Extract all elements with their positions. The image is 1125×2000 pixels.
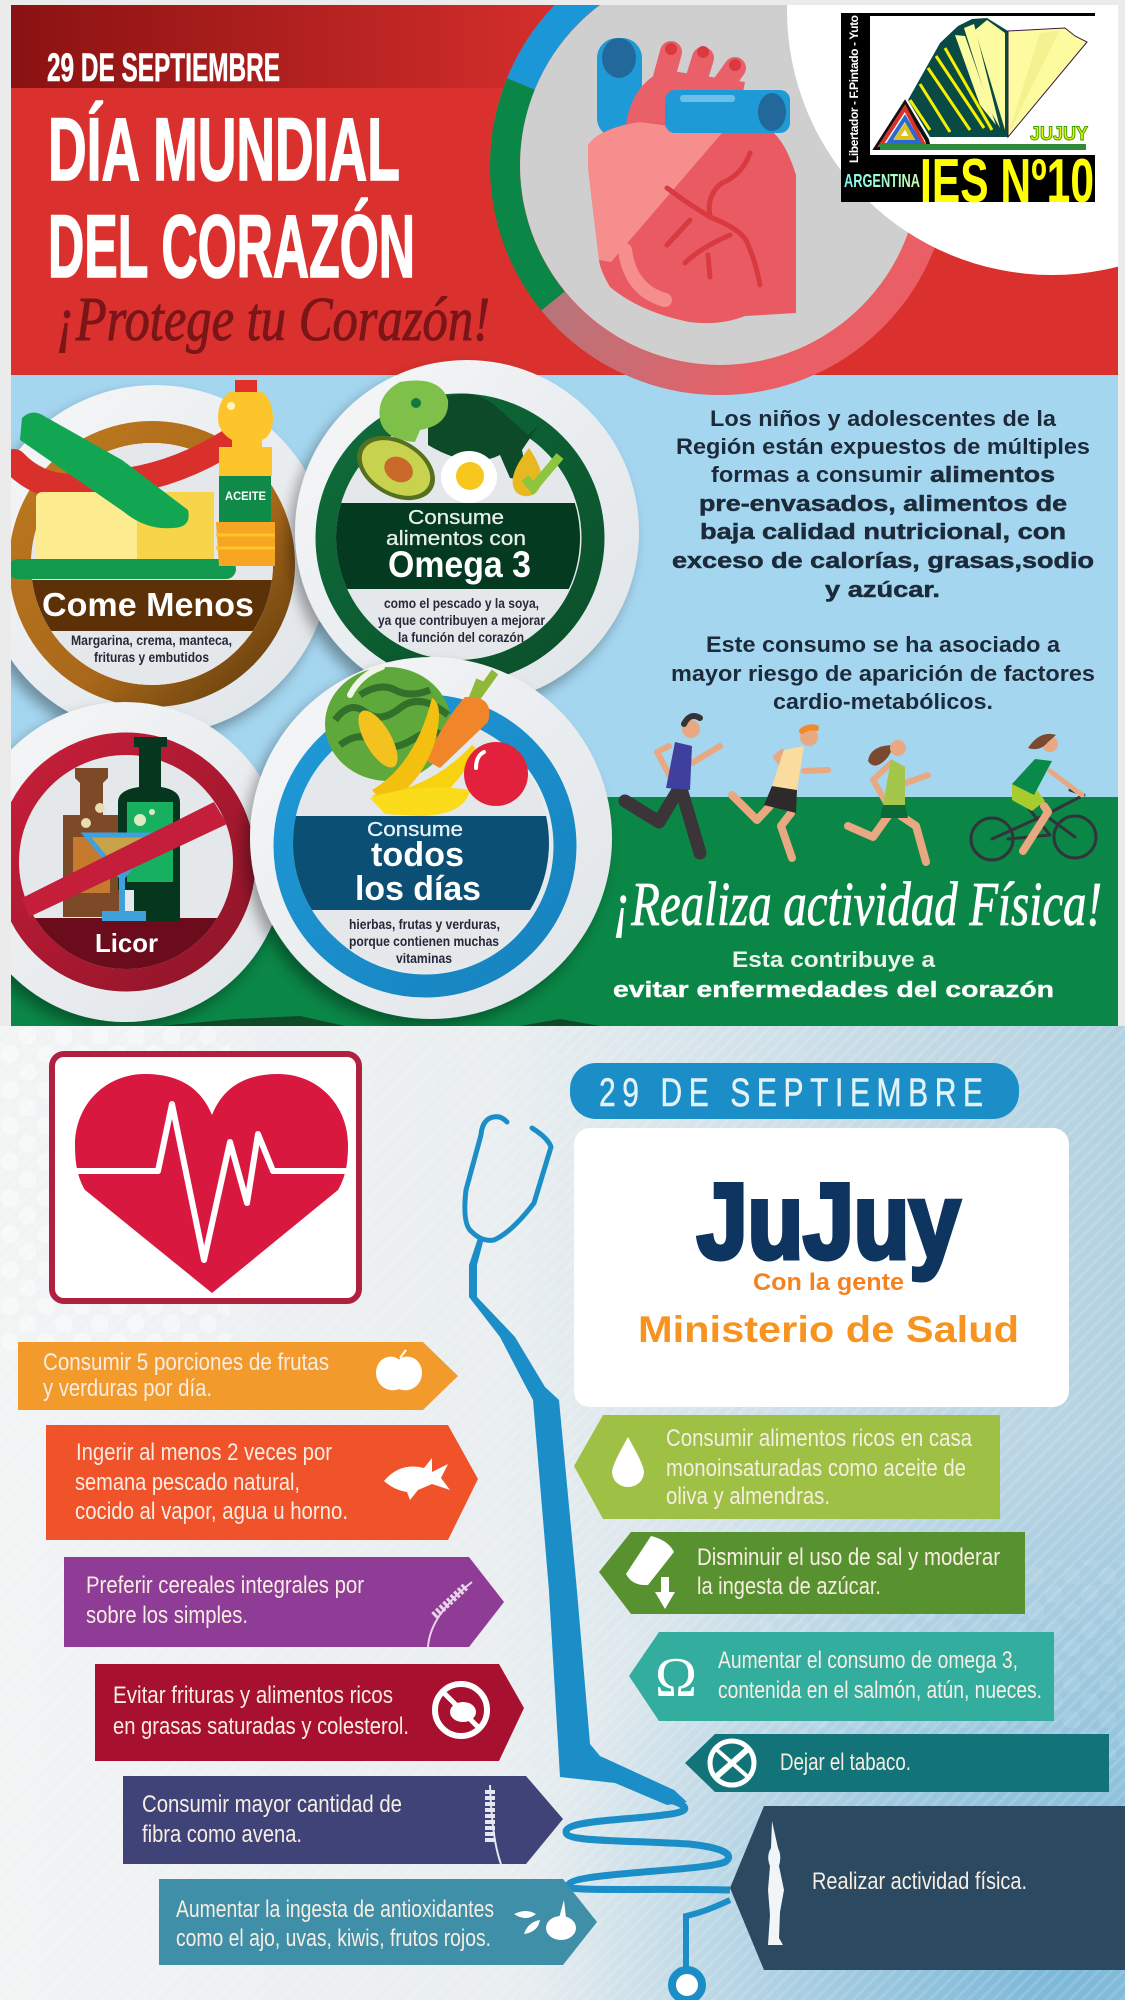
logo JUJUY: JUJUY (1030, 124, 1088, 145)
arrow: fibra: fibra como avena. (142, 1821, 302, 1848)
text block: intro paragraph: formas a consumir (711, 462, 922, 487)
knife (20, 412, 189, 528)
arrow: pescado: Ingerir al menos 2 veces por (76, 1439, 332, 1466)
arrow: frutas y verduras: y verduras por día. (43, 1375, 212, 1402)
panel: licor (0, 702, 285, 1022)
arrow: sal (599, 1532, 1025, 1614)
arrow: cereales (64, 1557, 504, 1647)
text block: intro paragraph (672, 406, 1094, 602)
panel: page background top (0, 0, 1125, 1030)
description: porque contienen muchas (349, 933, 499, 949)
ministry name: Ministerio de Salud (638, 1309, 1019, 1350)
inner disc (19, 755, 233, 969)
oil bottle (216, 380, 275, 566)
icon: heart frame (52, 1054, 359, 1301)
arrow: antioxidantes: Aumentar la ingesta de antioxidantes (176, 1896, 494, 1923)
watermelon (325, 667, 451, 781)
description: frituras y embutidos (94, 649, 209, 665)
bottle label: ACEITE (225, 489, 266, 503)
heart shape (75, 1074, 348, 1293)
text block: intro paragraph: Los niños y adolescentes de la (710, 406, 1057, 431)
icon: runner two (732, 727, 828, 858)
coloured ring around heart (505, 0, 935, 380)
arrow: antioxidantes: como el ajo, uvas, kiwis, frutos rojos. (176, 1925, 491, 1952)
icon: fruit and leaves (514, 1900, 576, 1940)
arrow: actividad fisica (730, 1806, 1125, 1970)
arrow: monoinsaturadas: monoinsaturadas como aceite de (666, 1455, 966, 1482)
banner text (386, 507, 531, 585)
plate (250, 657, 612, 1019)
plate (295, 360, 639, 704)
logo ARGENTINA: ARGENTINA (844, 171, 920, 191)
panel: omega 3 (295, 360, 639, 704)
corn (351, 705, 405, 773)
avocado (346, 423, 446, 513)
apple (464, 742, 528, 806)
text block: second paragraph: cardio-metabólicos. (773, 689, 993, 714)
icon: fish (384, 1458, 450, 1500)
icon: no smoking (710, 1741, 754, 1785)
arrow: frutas y verduras: Consumir 5 porciones de frutas (43, 1349, 329, 1376)
cutting board (8, 559, 236, 579)
text block: second paragraph: Este consumo se ha asociado a (706, 632, 1061, 657)
arrow: monoinsaturadas: Consumir alimentos ricos en casa (666, 1425, 973, 1452)
icon: no fried food (435, 1684, 487, 1736)
icon: cyclist (971, 734, 1096, 860)
ring (8, 744, 244, 980)
description: hierbas, frutas y verduras, (349, 916, 500, 932)
banner text (355, 819, 481, 908)
description (378, 595, 545, 645)
butter (36, 492, 214, 562)
banner text: Come Menos (42, 586, 254, 623)
date heading: 29 DE SEPTIEMBRE (47, 46, 280, 90)
activity text line 1: Esta contribuye a (732, 947, 936, 972)
bananas (370, 698, 475, 816)
logo: IES 10 (841, 13, 1095, 216)
arrow: tabaco (685, 1734, 1109, 1792)
arrow: cereales: sobre los simples. (86, 1602, 248, 1629)
arrow: omega: Aumentar el consumo de omega 3, (718, 1647, 1018, 1674)
title line 1: DÍA MUNDIAL (48, 99, 400, 199)
icon: anatomical heart (588, 38, 796, 323)
description: la función del corazón (398, 629, 524, 645)
arrow: frituras (95, 1664, 524, 1761)
description: vitaminas (396, 950, 452, 966)
icon: runner one (625, 716, 720, 853)
ban stripe (22, 802, 227, 917)
ring (285, 706, 565, 986)
date pill (570, 1063, 1019, 1119)
date pill: 29 DE SEPTIEMBRE (599, 1071, 983, 1115)
banner text: alimentos con (386, 528, 526, 550)
fish (428, 394, 539, 481)
arrow: frutas y verduras (18, 1342, 458, 1410)
icon: stethoscope (465, 1117, 730, 2000)
text block: intro paragraph: baja calidad nutricional, con (700, 519, 1066, 544)
white circle behind logo (787, 0, 1125, 275)
banner (20, 580, 280, 631)
arrow: fibra: Consumir mayor cantidad de (142, 1791, 402, 1818)
icon: apple (377, 1350, 421, 1389)
arrow: frituras: en grasas saturadas y colesterol. (113, 1713, 409, 1740)
base (10, 918, 250, 998)
icon: drop (612, 1437, 644, 1487)
arrow: pescado: cocido al vapor, agua u horno. (75, 1498, 348, 1525)
text block: intro paragraph: y azúcar. (825, 577, 940, 602)
ring (20, 432, 284, 696)
description: Margarina, crema, manteca, (71, 632, 232, 648)
panel: consume todos los dias (250, 657, 612, 1019)
arrow: omega: contenida en el salmón, atún, nueces. (718, 1677, 1042, 1704)
banner text: Consume (408, 507, 504, 529)
arrow: pescado (46, 1425, 478, 1540)
text block: second paragraph: mayor riesgo de aparición de factores (671, 661, 1095, 686)
activity text line 2: evitar enfermedades del corazón (613, 977, 1054, 1002)
text block: intro paragraph: pre-envasados, alimentos de (699, 491, 1067, 516)
arrow: omega (629, 1632, 1054, 1721)
oil drop with check (513, 448, 560, 496)
plate (0, 702, 285, 1022)
inner disc (336, 428, 508, 660)
icon: salt shaker (626, 1536, 675, 1609)
arrow: sal: Disminuir el uso de sal y moderar (697, 1544, 1000, 1571)
arrow: cereales: Preferir cereales integrales por (86, 1572, 364, 1599)
text block: intro paragraph: alimentos (930, 462, 1055, 487)
title line 2: DEL CORAZÓN (48, 196, 415, 296)
icon: wheat (428, 1582, 472, 1647)
arrow: tabaco: Dejar el tabaco. (780, 1749, 911, 1776)
green pear (379, 380, 448, 442)
tagline: Con la gente (753, 1269, 904, 1296)
panel: ministry logo card (574, 1128, 1069, 1407)
banner text: Consume (367, 819, 463, 841)
heartbeat line (74, 1104, 352, 1260)
arrow: fibra (123, 1776, 563, 1864)
banner (330, 503, 590, 589)
text block: second paragraph (671, 632, 1095, 714)
banner (285, 816, 555, 910)
icon: oat (490, 1785, 501, 1864)
logo fan of books (908, 18, 1087, 137)
icon: runner three (848, 740, 928, 862)
sausage (14, 442, 229, 487)
plate (0, 385, 330, 735)
icon: omega: Ω (655, 1647, 697, 1709)
logo JuJuy: JuJuy (697, 1161, 960, 1281)
arrow: actividad fisica: Realizar actividad física. (812, 1868, 1027, 1895)
arrow: pescado: semana pescado natural, (75, 1469, 300, 1496)
inner disc (31, 443, 273, 685)
egg (441, 451, 497, 503)
label: Licor (95, 928, 158, 958)
description (349, 916, 500, 966)
panel: sky and grass (11, 375, 1118, 1026)
green bottle (118, 737, 180, 921)
banner text: todos (371, 836, 464, 874)
panel: lower infographic background (0, 1026, 1125, 2000)
ring (327, 405, 593, 671)
arrow: monoinsaturadas: oliva y almendras. (666, 1483, 830, 1510)
description: ya que contribuyen a mejorar (378, 612, 545, 628)
brown bottle (63, 768, 120, 917)
description: como el pescado y la soya, (384, 595, 539, 611)
subtitle: ¡Protege tu Corazón! (56, 286, 490, 354)
grey circle behind heart (520, 0, 920, 365)
panel: come menos (0, 380, 330, 735)
carrot (425, 672, 495, 768)
arrow: monoinsaturadas (574, 1415, 1000, 1519)
logo white box (870, 16, 1095, 155)
arrow: sal: la ingesta de azúcar. (697, 1573, 881, 1600)
panel: top infographic (0, 0, 1125, 1026)
icon: standing figure (768, 1821, 784, 1945)
red header band (11, 5, 1118, 375)
cocktail glass (86, 835, 157, 921)
text block: intro paragraph: exceso de calorías, grasas,sodio (672, 548, 1094, 573)
banner text: Omega 3 (388, 544, 531, 585)
arrow: antioxidantes (159, 1879, 597, 1965)
logo vertical text: Libertador - F.Pintado - Yuto (847, 15, 861, 163)
logo green bar (880, 144, 1086, 150)
banner text: los días (355, 870, 481, 908)
description (71, 632, 232, 665)
logo triangle (876, 103, 929, 148)
inner disc (293, 715, 549, 971)
text block: intro paragraph: Región están expuestos de múltiples (676, 434, 1090, 459)
arrow: frituras: Evitar frituras y alimentos ricos (113, 1682, 393, 1709)
